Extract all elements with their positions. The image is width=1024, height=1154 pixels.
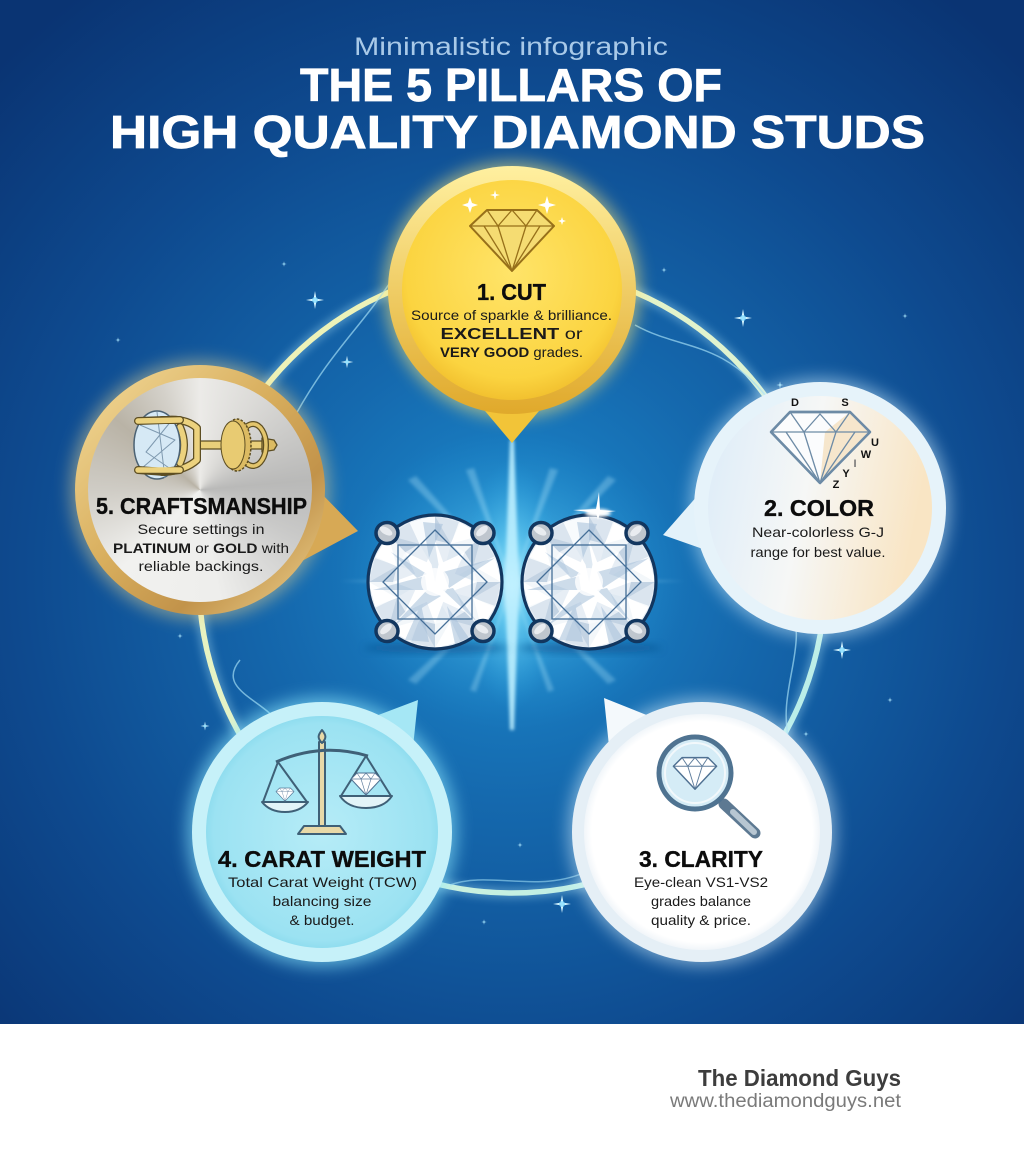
description bbox=[411, 307, 612, 360]
color grade letters: Z bbox=[833, 479, 840, 491]
subtitle: Minimalistic infographic bbox=[354, 33, 668, 61]
backing loop bbox=[240, 424, 266, 466]
description: Source of sparkle & brilliance. bbox=[411, 307, 612, 323]
icon: graded diamond bbox=[771, 397, 879, 491]
description bbox=[113, 521, 289, 574]
color grade letters: D bbox=[791, 397, 799, 409]
description: Secure settings in bbox=[138, 521, 264, 537]
connecting ring bbox=[199, 267, 825, 893]
icon: gold diamond bbox=[462, 190, 566, 271]
description bbox=[634, 874, 768, 928]
description bbox=[750, 524, 886, 560]
color grade letters: W bbox=[861, 449, 872, 461]
backing disc bbox=[223, 419, 251, 471]
description: EXCELLENT or bbox=[440, 326, 582, 343]
central light burst bbox=[337, 430, 687, 730]
footer brand bbox=[669, 1065, 902, 1112]
color grade letters bbox=[791, 397, 879, 491]
pillar 4: carat weight bbox=[187, 697, 457, 967]
description bbox=[228, 874, 417, 928]
stud earrings bbox=[355, 492, 669, 662]
brushed metal disc bbox=[88, 378, 312, 602]
heading: 2. COLOR bbox=[764, 495, 874, 521]
footer band bbox=[0, 1024, 1024, 1154]
description: balancing size bbox=[272, 893, 372, 909]
post bbox=[197, 441, 263, 449]
description: range for best value. bbox=[750, 544, 886, 560]
description: reliable backings. bbox=[138, 558, 264, 574]
description: & budget. bbox=[290, 912, 354, 928]
title line 1: THE 5 PILLARS OF bbox=[300, 59, 722, 111]
icon: stud with screw back bbox=[134, 411, 277, 479]
background sparkles bbox=[115, 261, 908, 925]
icon: magnifying glass bbox=[659, 737, 755, 833]
description: VERY GOOD grades. bbox=[440, 344, 583, 360]
pillar 1: cut bbox=[384, 162, 640, 443]
title block bbox=[110, 33, 925, 158]
left stud bbox=[355, 502, 515, 662]
color grade letters: I bbox=[853, 458, 857, 470]
footer brand: The Diamond Guys bbox=[698, 1065, 901, 1091]
heading: 1. CUT bbox=[477, 279, 546, 305]
description: grades balance bbox=[651, 893, 751, 909]
description: quality & price. bbox=[651, 912, 751, 928]
description: Eye-clean VS1-VS2 bbox=[634, 874, 768, 890]
title line 2: HIGH QUALITY DIAMOND STUDS bbox=[110, 106, 925, 158]
round stone bbox=[134, 411, 180, 479]
icon: balance scale bbox=[262, 730, 392, 834]
front prongs bbox=[138, 420, 165, 472]
footer brand: www.thediamondguys.net bbox=[669, 1091, 902, 1112]
color grade letters: U bbox=[871, 437, 879, 449]
stud glint bbox=[573, 492, 616, 520]
heading: 3. CLARITY bbox=[639, 846, 763, 872]
color grade letters: Y bbox=[842, 468, 850, 480]
pillar 3: clarity bbox=[568, 698, 836, 966]
description: Near-colorless G-J bbox=[752, 524, 884, 540]
stud shadows bbox=[364, 643, 662, 653]
color grade letters: S bbox=[841, 397, 849, 409]
heading: 5. CRAFTSMANSHIP bbox=[96, 493, 307, 519]
description: PLATINUM or GOLD with bbox=[113, 540, 289, 556]
gold basket bbox=[165, 420, 197, 472]
pillar 2: color bbox=[663, 378, 950, 638]
right stud bbox=[509, 502, 669, 662]
heading: 4. CARAT WEIGHT bbox=[218, 846, 426, 872]
description: Total Carat Weight (TCW) bbox=[228, 874, 417, 890]
pillar 5: craftsmanship bbox=[70, 360, 358, 620]
